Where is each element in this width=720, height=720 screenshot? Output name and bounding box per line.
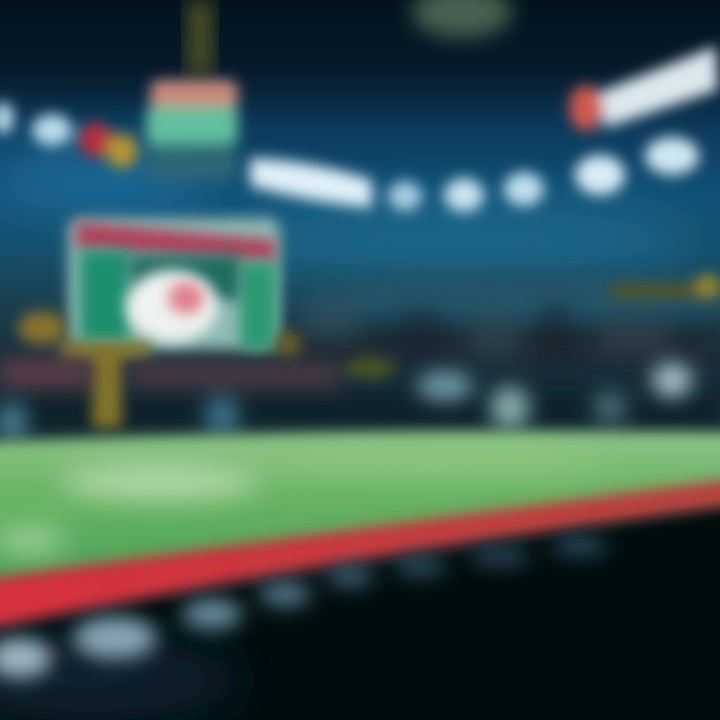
pitch highlights (0, 452, 610, 554)
right yellow accents (610, 274, 720, 298)
central light band (250, 137, 699, 212)
crowd and side lights (0, 358, 692, 442)
red sideline (0, 478, 720, 630)
foreground left glow (0, 640, 240, 720)
upper scoreboard (146, 80, 238, 180)
green pitch (0, 431, 720, 590)
ceiling light (412, 0, 512, 38)
yellow goal post (18, 311, 396, 428)
hanging post (188, 0, 212, 75)
light band left (0, 102, 138, 168)
dark foreground (0, 503, 720, 720)
foreground blue lights (0, 537, 608, 678)
right banner (569, 46, 718, 131)
main scoreboard (68, 218, 280, 350)
crowd texture (300, 305, 670, 360)
